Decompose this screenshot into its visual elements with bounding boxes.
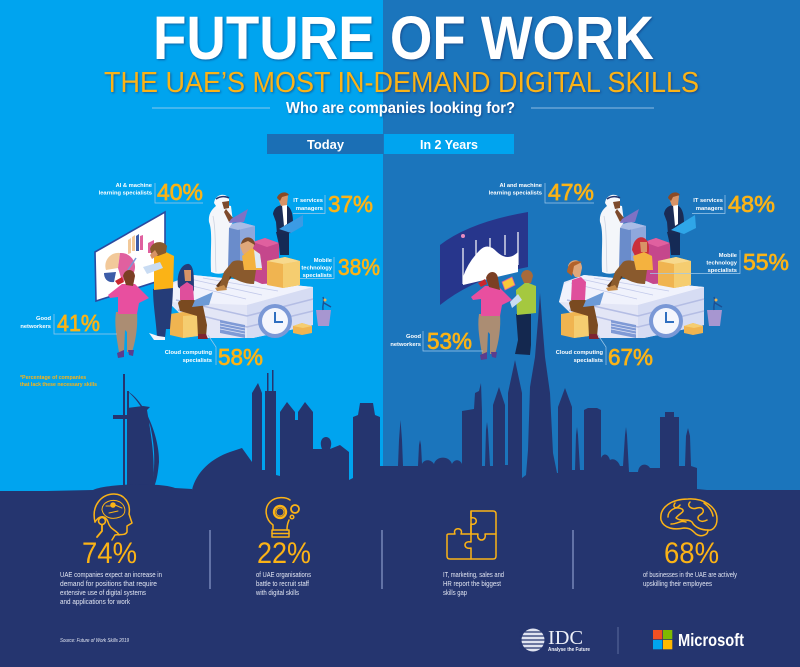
stat: AI today: [99, 179, 203, 205]
footer band: [0, 491, 800, 667]
footnote: [20, 375, 97, 388]
illustration: today scene: [95, 192, 331, 358]
logo: IDC: Analyse the Future: [548, 647, 590, 653]
stat: mobile 2 years: specialists: [708, 268, 737, 274]
stat: networkers today: 41%: [57, 310, 100, 336]
stat: mobile 2 years: [650, 249, 789, 275]
brighter tablet: [671, 215, 696, 234]
stat: 74%: and applications for work: [60, 597, 130, 606]
tab: today: Today: [307, 138, 344, 152]
stat: mobile 2 years: Mobile: [719, 253, 737, 259]
stat: AI 2 years: [489, 179, 594, 205]
icon: lightbulb with gears: [266, 498, 299, 537]
icon: puzzle: [447, 511, 496, 559]
text: skills gap: IT, marketing, sales and: [443, 570, 504, 579]
text: skills gap: [443, 570, 504, 597]
stat: cloud 2 years: 67%: [608, 344, 653, 370]
stat: networkers 2 years: 53%: [427, 328, 472, 354]
text: skills gap: skills gap: [443, 588, 467, 597]
person: man in yellow: [143, 242, 174, 340]
skyline: dome and towers: [192, 370, 400, 500]
stat: IT 2 years: [692, 191, 775, 217]
stat: 74%: demand for positions that require: [60, 579, 157, 588]
skyline: Burj Al Arab: [0, 374, 192, 500]
stat: AI today: 40%: [157, 179, 203, 205]
logo: IDC: IDC: [548, 627, 583, 649]
stat: mobile today: specialists: [303, 273, 332, 279]
stat: cloud 2 years: [556, 335, 653, 370]
logo: IDC: [519, 627, 590, 653]
stat: 74%: extensive use of digital systems: [60, 588, 146, 597]
stat: 68%: 68%: [664, 537, 719, 570]
background: in 2 years panel: [383, 0, 800, 500]
person: seated woman with red hijab: [632, 237, 653, 270]
stat: IT today: IT services: [293, 198, 323, 204]
stat: cloud 2 years: specialists: [574, 358, 603, 364]
stat: 68%: [643, 537, 737, 588]
text: skills gap: HR report the biggest: [443, 579, 501, 588]
stat: 22%: [255, 537, 311, 597]
whiteboard: [95, 212, 165, 301]
stat: IT 2 years: 48%: [728, 191, 775, 217]
stat: networkers today: Good: [36, 316, 51, 322]
stat: mobile 2 years: 55%: [743, 249, 789, 275]
stat: 68%: upskilling their employees: [643, 579, 712, 588]
stat: 68%: of businesses in the UAE are actively: [643, 570, 737, 579]
icon: AI head: [94, 494, 132, 540]
stat: 74%: 74%: [82, 537, 137, 570]
person: seated woman with ponytail: [567, 260, 586, 300]
divider: [209, 530, 211, 589]
source: Source: Future of Work Skills 2019: [60, 638, 129, 644]
person: seated woman with headset: [240, 237, 262, 270]
stat: AI 2 years: AI and machine: [500, 183, 542, 189]
stat: cloud today: specialists: [183, 358, 212, 364]
data screen: [440, 212, 528, 305]
divider: [572, 530, 574, 589]
stat: cloud today: 58%: [218, 344, 263, 370]
stat: 74%: UAE companies expect an increase in: [60, 570, 162, 579]
stat: IT today: 37%: [328, 191, 373, 217]
stat: 74%: [60, 537, 162, 606]
tab: in 2 years: [384, 134, 514, 154]
stat: mobile today: 38%: [338, 254, 380, 280]
stat: AI today: learning specialists: [99, 190, 152, 196]
stat: AI 2 years: 47%: [548, 179, 594, 205]
stat: 22%: with digital skills: [255, 588, 299, 597]
tab: in 2 years: In 2 Years: [420, 138, 478, 152]
icon: brain: [661, 499, 717, 536]
tab: today: [267, 134, 383, 154]
divider: [381, 530, 383, 589]
stat: mobile today: technology: [301, 266, 333, 272]
stat: cloud today: Cloud computing: [165, 350, 212, 356]
illustration: in 2 years scene: [440, 192, 722, 360]
stat: AI today: AI & machine: [116, 183, 152, 189]
logo: Microsoft: Microsoft: [678, 630, 744, 650]
stat: IT today: [293, 191, 373, 217]
stat: AI 2 years: learning specialists: [489, 190, 542, 196]
stat: 22%: 22%: [257, 537, 311, 570]
person: woman in pink: [471, 272, 512, 360]
subheading with rules: Who are companies looking for?: [286, 100, 515, 117]
stat: mobile today: Mobile: [314, 258, 332, 264]
skyline: Burj Khalifa and downtown: [383, 293, 800, 500]
logo: Microsoft: [653, 630, 744, 650]
tablet: today: [279, 215, 303, 233]
stat: mobile 2 years: technology: [706, 260, 738, 266]
title: FUTURE OF WORK: [153, 4, 654, 72]
person: man in green: [502, 270, 536, 355]
person: woman in pink: [108, 270, 149, 358]
stat: networkers 2 years: [390, 328, 483, 354]
stat: networkers today: networkers: [20, 324, 51, 330]
stat: networkers 2 years: networkers: [390, 342, 421, 348]
subtitle: THE UAE’S MOST IN-DEMAND DIGITAL SKILLS: [104, 67, 699, 99]
person: seated woman with hijab: [178, 264, 194, 300]
background: today panel: [0, 0, 384, 500]
stat: cloud today: [165, 335, 263, 370]
stat: mobile today: [300, 254, 380, 280]
divider: [617, 627, 619, 654]
stat: 22%: battle to recruit staff: [256, 579, 309, 588]
stat: networkers today: [20, 310, 117, 336]
stat: IT 2 years: IT services: [693, 198, 723, 204]
footnote: that lack these necessary skills: [20, 382, 97, 388]
skyline silhouette: [0, 293, 800, 500]
stat: cloud 2 years: Cloud computing: [556, 350, 603, 356]
stat: IT today: managers: [296, 206, 323, 212]
footnote: *Percentage of companies: [20, 375, 86, 381]
stat: IT 2 years: managers: [696, 206, 723, 212]
stat: 22%: of UAE organisations: [256, 570, 311, 579]
stat: networkers 2 years: Good: [406, 334, 421, 340]
